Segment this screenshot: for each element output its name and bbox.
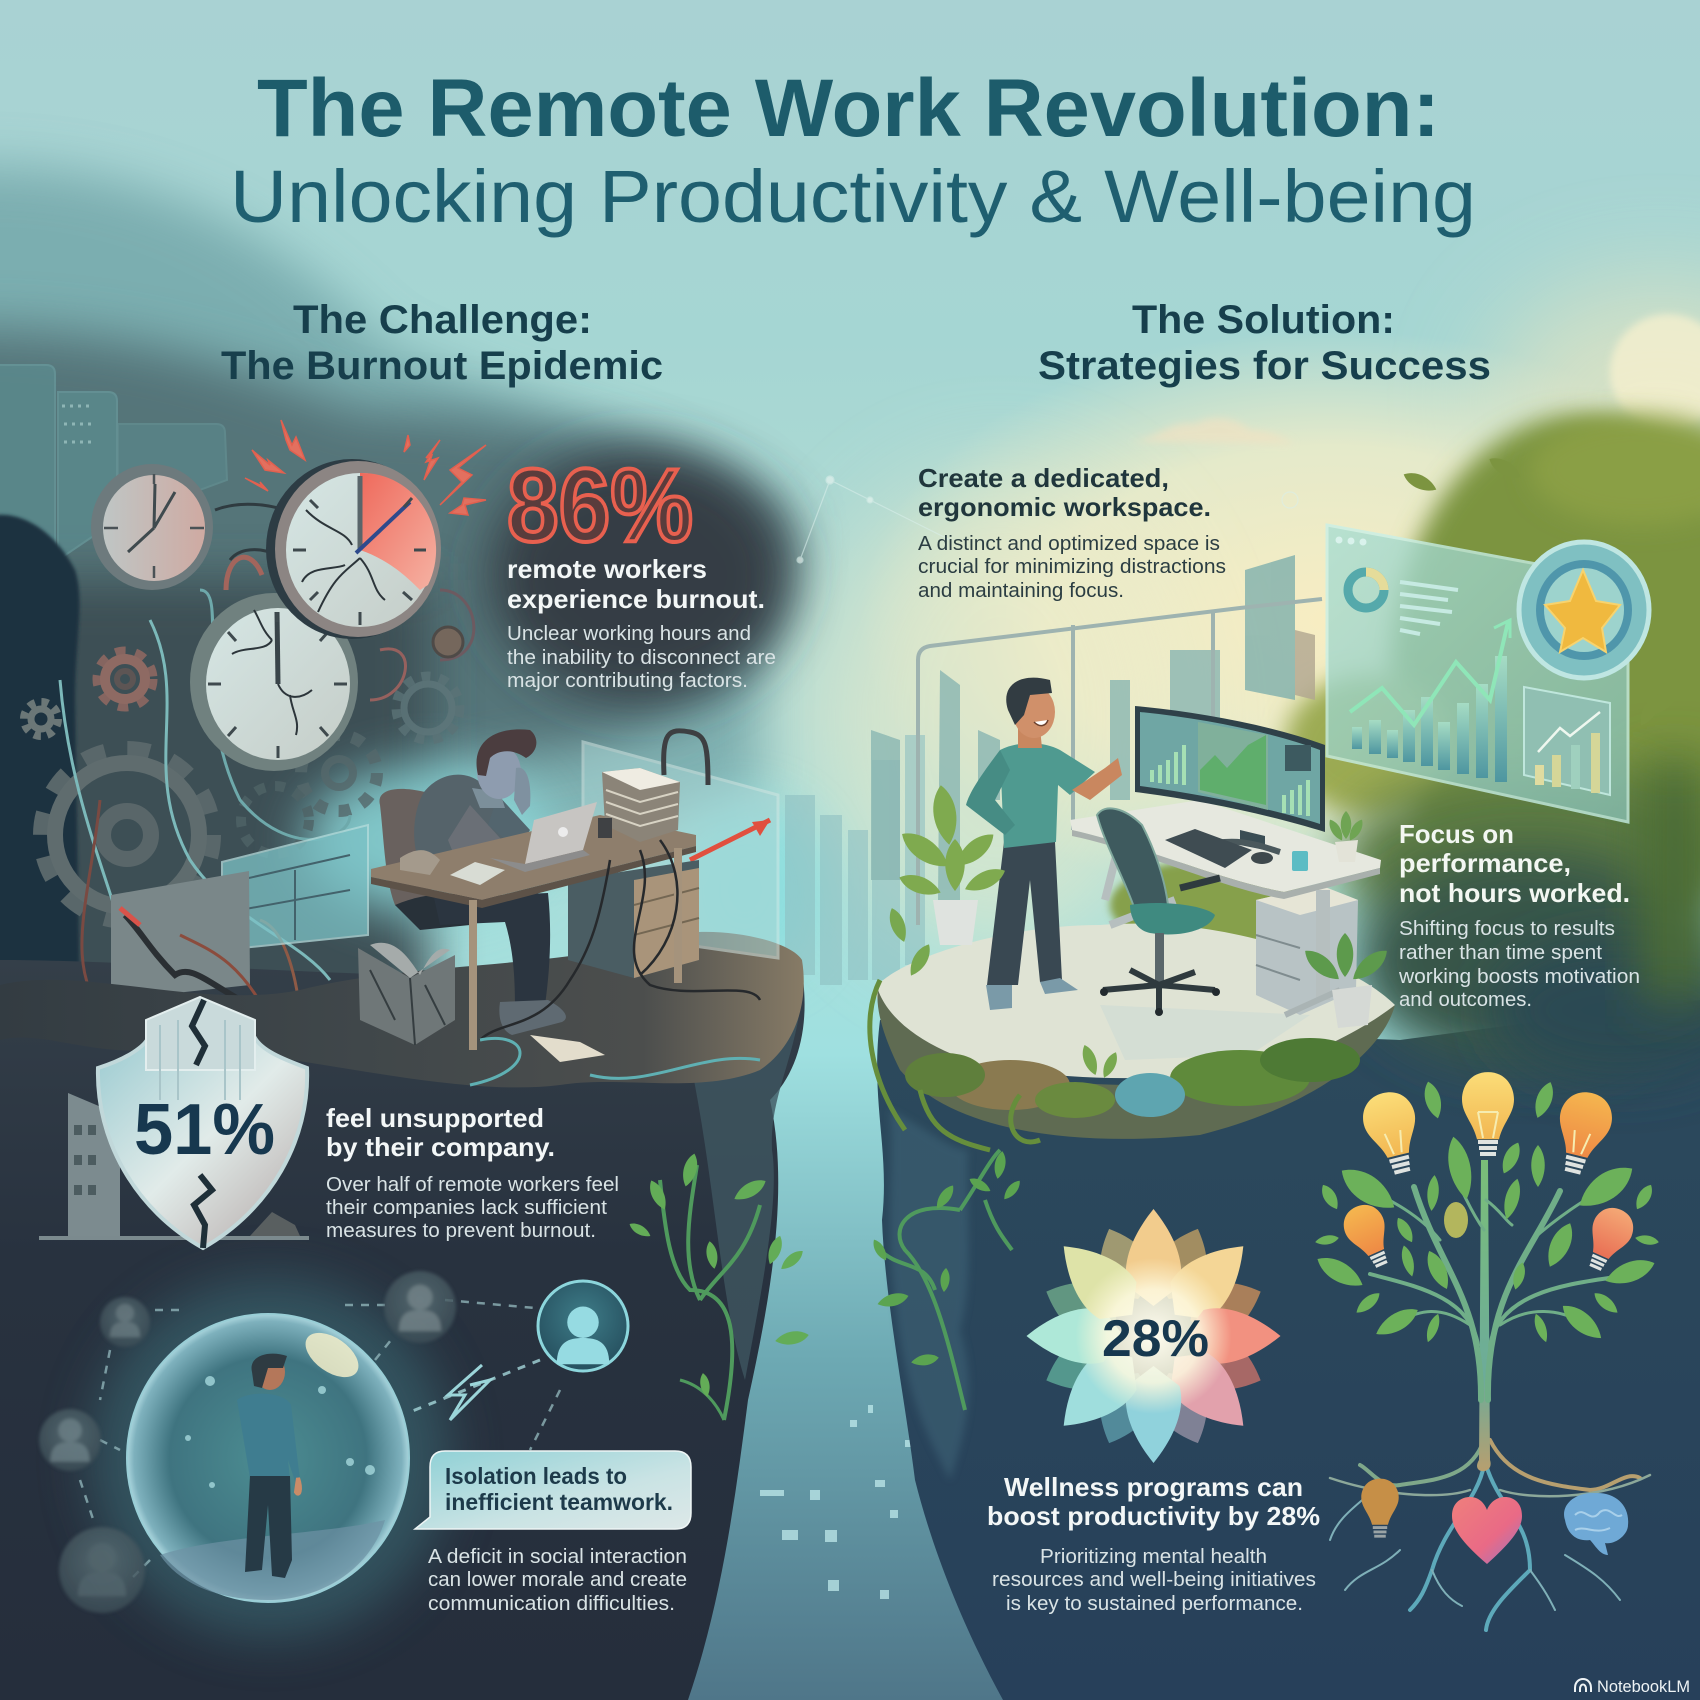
faint office towers left — [0, 365, 227, 600]
isolation body: communication difficulties. — [428, 1593, 675, 1615]
left cliff — [0, 960, 805, 1700]
constellation network lines — [797, 476, 1298, 563]
window dots in tower — [62, 406, 94, 442]
bubble label — [445, 1463, 673, 1515]
shoes — [986, 978, 1078, 1010]
right workspace platform — [877, 924, 1395, 1078]
mini chart — [1524, 687, 1610, 795]
workspace text — [918, 463, 1226, 602]
glass dashboard behind desk — [583, 731, 778, 958]
left cliff lit rock face — [690, 1010, 800, 1380]
performance body: working boosts motivation — [1398, 966, 1640, 988]
holographic analytics panel — [1327, 525, 1649, 822]
paper stack — [598, 768, 680, 842]
leaf sprigs — [1401, 453, 1693, 729]
head — [477, 745, 521, 799]
workspace body: crucial for minimizing distractions — [918, 556, 1226, 578]
stat body: resources and well-being initiatives — [992, 1569, 1316, 1591]
file drawers — [1256, 885, 1358, 1015]
left arm — [966, 750, 1015, 835]
stat number: 86% — [507, 448, 693, 564]
heading: the solution: The Solution: — [1132, 298, 1395, 342]
stat body — [326, 1174, 619, 1242]
neck — [1018, 728, 1042, 748]
stat headline: boost productivity by 28% — [987, 1501, 1320, 1531]
stat headline — [987, 1472, 1320, 1531]
clock: middle cracked — [190, 593, 358, 771]
teal glow around bubble — [90, 1278, 450, 1638]
bar chart — [1352, 656, 1507, 782]
potted plant left — [896, 784, 1008, 945]
bulb: upper right — [1548, 1087, 1617, 1177]
floating specks — [185, 1376, 375, 1488]
donut chart — [1348, 572, 1384, 608]
smile — [1034, 720, 1048, 726]
bulb: top center — [1462, 1072, 1514, 1154]
text lines — [1400, 582, 1458, 634]
stat headline — [507, 554, 765, 614]
NotebookLM watermark: NotebookLM — [1597, 1677, 1690, 1696]
standing desk — [1070, 800, 1381, 1015]
stat body — [992, 1546, 1316, 1615]
legs — [434, 893, 550, 1005]
monitor chart area — [1198, 722, 1268, 810]
tangled wires — [60, 504, 474, 1030]
stat headline — [326, 1103, 555, 1162]
right cliff lit column — [890, 1110, 969, 1480]
faded avatar — [384, 1271, 456, 1343]
performance body: Shifting focus to results — [1399, 918, 1615, 940]
bulb: mid left — [1337, 1199, 1400, 1272]
clock: small rear — [91, 464, 213, 590]
shield with cracked building — [39, 997, 309, 1248]
isolated man — [237, 1354, 301, 1578]
faded avatar — [100, 1297, 150, 1347]
building behind — [68, 1093, 120, 1236]
gear: background pair — [241, 676, 460, 854]
shoe — [499, 1000, 566, 1035]
performance body: rather than time spent — [1399, 942, 1602, 964]
center city skyline — [785, 735, 925, 985]
left vine — [627, 1152, 810, 1420]
workspace body: and maintaining focus. — [918, 580, 1124, 602]
stat headline: by their company. — [326, 1132, 555, 1162]
left scene: gears and clocks — [24, 420, 486, 1030]
stress lightning marks — [245, 420, 486, 515]
bud — [1444, 1202, 1468, 1238]
right vine — [870, 1150, 1023, 1410]
bulb: upper left — [1358, 1087, 1427, 1177]
left platform rock — [0, 932, 804, 1087]
torso — [414, 775, 533, 880]
heading: the challenge: The Challenge: — [293, 298, 592, 342]
desk — [371, 815, 696, 1050]
performance body: and outcomes. — [1399, 989, 1532, 1011]
workspace headline — [918, 463, 1211, 522]
stat body: the inability to disconnect are — [507, 647, 776, 669]
gear: large — [43, 751, 211, 919]
legs — [987, 842, 1062, 985]
connecting dashes — [80, 1300, 560, 1580]
brain — [1564, 1493, 1628, 1555]
ground — [39, 1236, 309, 1240]
window frame — [918, 599, 1322, 925]
title — [230, 63, 1476, 238]
stat headline: Wellness programs can — [1004, 1472, 1303, 1502]
shield body — [98, 1038, 307, 1248]
workspace headline: ergonomic workspace. — [918, 492, 1211, 522]
workspace body: A distinct and optimized space is — [918, 533, 1220, 555]
gear: grey small — [24, 702, 58, 736]
chair — [379, 789, 432, 918]
trend line — [1350, 620, 1510, 725]
loose note — [530, 1035, 605, 1062]
small desk plant — [1326, 811, 1366, 862]
potted plant right — [1300, 933, 1392, 1028]
heading: the challenge: The Burnout Epidemic — [221, 344, 663, 388]
chasm data squares — [760, 1405, 917, 1599]
cracked monitors — [111, 825, 368, 1020]
bulb: root — [1361, 1479, 1399, 1536]
bubble floor — [160, 1520, 385, 1600]
tissue box — [358, 943, 455, 1045]
right scene background foliage and city — [871, 415, 1700, 1080]
crack — [192, 1000, 212, 1248]
keyboard and mouse — [1165, 829, 1308, 871]
filing cabinet — [568, 860, 699, 978]
hair — [1006, 678, 1052, 725]
performance headline: Focus on — [1399, 819, 1514, 849]
title: The Remote Work Revolution: — [257, 63, 1440, 154]
gear: small red — [98, 652, 152, 706]
title: Unlocking Productivity & Well-being — [230, 155, 1476, 238]
stat: 51 percent unsupported — [134, 1090, 619, 1242]
stat headline: experience burnout. — [507, 584, 765, 614]
stat: 28 percent wellness — [987, 1310, 1320, 1615]
faded avatar — [39, 1409, 101, 1471]
glowing core — [1076, 1258, 1232, 1414]
burned out worker at desk — [379, 729, 566, 1035]
window dots — [1336, 536, 1366, 546]
workspace body — [918, 533, 1226, 602]
heading: the solution: Strategies for Success — [1038, 344, 1491, 388]
stat body: Over half of remote workers feel — [326, 1174, 619, 1196]
laptop — [490, 802, 597, 872]
bright avatar — [538, 1281, 628, 1371]
office chair — [1097, 808, 1220, 1016]
stat body: measures to prevent burnout. — [326, 1220, 596, 1242]
glass bubble — [127, 1314, 409, 1602]
cables on rock — [480, 840, 760, 1040]
stat body: Prioritizing mental health — [1040, 1546, 1267, 1568]
isolation body: A deficit in social interaction — [428, 1546, 687, 1568]
front petals — [1026, 1209, 1280, 1463]
idea tree — [1313, 1072, 1660, 1630]
dark silhouette far left — [0, 515, 80, 1000]
supporting arm — [488, 795, 530, 850]
bubble label: inefficient teamwork. — [445, 1489, 673, 1515]
highlight — [298, 1324, 366, 1386]
heading: the challenge — [221, 298, 663, 388]
lightning link — [448, 1365, 490, 1420]
workspace headline: Create a dedicated, — [918, 463, 1169, 493]
performance headline — [1399, 819, 1630, 908]
arm — [448, 805, 528, 880]
stat body: major contributing factors. — [507, 670, 748, 692]
stat number: 28% — [1102, 1310, 1209, 1368]
rubble — [250, 1212, 300, 1236]
performance body — [1398, 918, 1640, 1011]
speech bubble — [415, 1451, 691, 1529]
isolation body — [428, 1546, 687, 1615]
city towers — [871, 555, 1315, 900]
happy worker — [966, 678, 1122, 1010]
trunk — [1477, 1160, 1491, 1471]
small padlock gear detail — [433, 627, 463, 657]
stat body — [507, 623, 776, 692]
warm light on right side — [820, 280, 1700, 960]
heading: the solution — [1038, 298, 1491, 388]
roots — [1330, 1440, 1650, 1630]
head — [1013, 686, 1055, 738]
performance text — [1398, 819, 1640, 1011]
clock: large with red wedge — [266, 459, 441, 639]
star badge — [1519, 542, 1649, 678]
windows — [74, 1125, 96, 1195]
torso — [1000, 743, 1095, 848]
bulb: mid right — [1577, 1202, 1640, 1275]
forearm and fist — [1072, 758, 1122, 800]
stat body: their companies lack sufficient — [326, 1197, 607, 1219]
performance headline: performance, — [1399, 848, 1571, 878]
hand — [514, 768, 530, 815]
wellness flower — [1026, 1209, 1280, 1463]
back petals — [1036, 1219, 1271, 1453]
stat headline: feel unsupported — [326, 1103, 544, 1133]
right cliff — [877, 1000, 1700, 1700]
isolation body: can lower morale and create — [428, 1569, 687, 1591]
tower in shield — [146, 997, 255, 1070]
heart — [1452, 1497, 1522, 1564]
stat body: Unclear working hours and — [507, 623, 751, 645]
branches — [1368, 1187, 1609, 1400]
haze and storm clouds left — [0, 166, 825, 1040]
hair — [477, 729, 536, 776]
stat body: is key to sustained performance. — [1006, 1593, 1303, 1615]
stat number: 51% — [134, 1090, 275, 1170]
seat — [395, 894, 500, 930]
isolation text — [428, 1463, 687, 1615]
platform earth and foliage — [870, 906, 1395, 1150]
stat: 86 percent burnout — [507, 448, 776, 692]
performance headline: not hours worked. — [1399, 878, 1630, 908]
bubble label: Isolation leads to — [445, 1463, 627, 1489]
isolation scene — [39, 1271, 628, 1613]
faded avatar — [59, 1527, 145, 1613]
stat headline: remote workers — [507, 554, 707, 584]
curved monitor — [1135, 706, 1325, 852]
neck — [472, 788, 505, 808]
leaves — [1313, 1080, 1660, 1345]
